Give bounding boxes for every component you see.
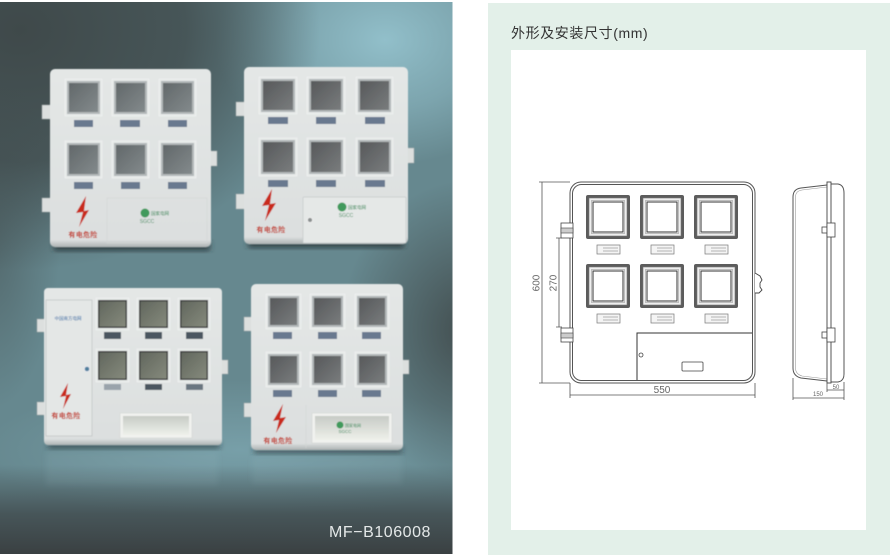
dimension: depth 150: 150 xyxy=(813,392,824,398)
panel: product photo background xyxy=(0,2,452,554)
body outline xyxy=(570,182,755,383)
product: meter box top left: 有电危险 xyxy=(68,230,98,239)
dimension: height 600 xyxy=(532,182,570,383)
dimension: depth 50 xyxy=(827,382,844,392)
product: meter box bottom left xyxy=(37,288,228,485)
dimension: height 600: 600 xyxy=(532,274,542,291)
dimension: width 550: 550 xyxy=(654,385,671,396)
lower door xyxy=(637,333,752,380)
product: meter box top left: 国家电网 xyxy=(151,210,169,217)
meter windows xyxy=(586,195,738,308)
dimension: depth 50: 50 xyxy=(833,385,840,391)
product: meter box bottom right: 有电危险 xyxy=(263,436,293,445)
drawing: front view xyxy=(532,182,762,398)
product: meter box bottom left: 中国南方电网 xyxy=(54,315,82,322)
dimension: spacing 270 xyxy=(548,238,562,327)
product: meter box bottom right xyxy=(244,284,409,484)
side brackets xyxy=(822,223,835,342)
panel: dimensions background xyxy=(488,3,890,555)
product: meter box top right: SGCC xyxy=(339,213,354,219)
label slots xyxy=(597,245,728,323)
side profile xyxy=(793,182,844,383)
hinges and mounting tabs xyxy=(561,223,762,342)
dimension: spacing 270: 270 xyxy=(548,274,560,291)
product: meter box bottom right: 国家电网 xyxy=(345,422,361,428)
product: meter box bottom left: 有电危险 xyxy=(51,411,81,420)
product: meter box top left xyxy=(42,69,217,251)
drawing: side view xyxy=(793,182,844,400)
product: meter box top right: 有电危险 xyxy=(256,225,286,234)
product: meter box bottom right: SGCC xyxy=(338,429,352,434)
product: meter box top left: SGCC xyxy=(140,219,155,225)
product: meter box top right xyxy=(236,67,414,248)
product: meter box top right: 国家电网 xyxy=(348,204,366,211)
dimension: depth 150 xyxy=(793,378,844,400)
dimension: width 550 xyxy=(570,383,755,398)
panel: drawing area xyxy=(511,50,866,530)
heading: dimensions: 外形及安装尺寸(mm) xyxy=(511,25,648,41)
model number: MF−B106008 xyxy=(329,524,431,541)
